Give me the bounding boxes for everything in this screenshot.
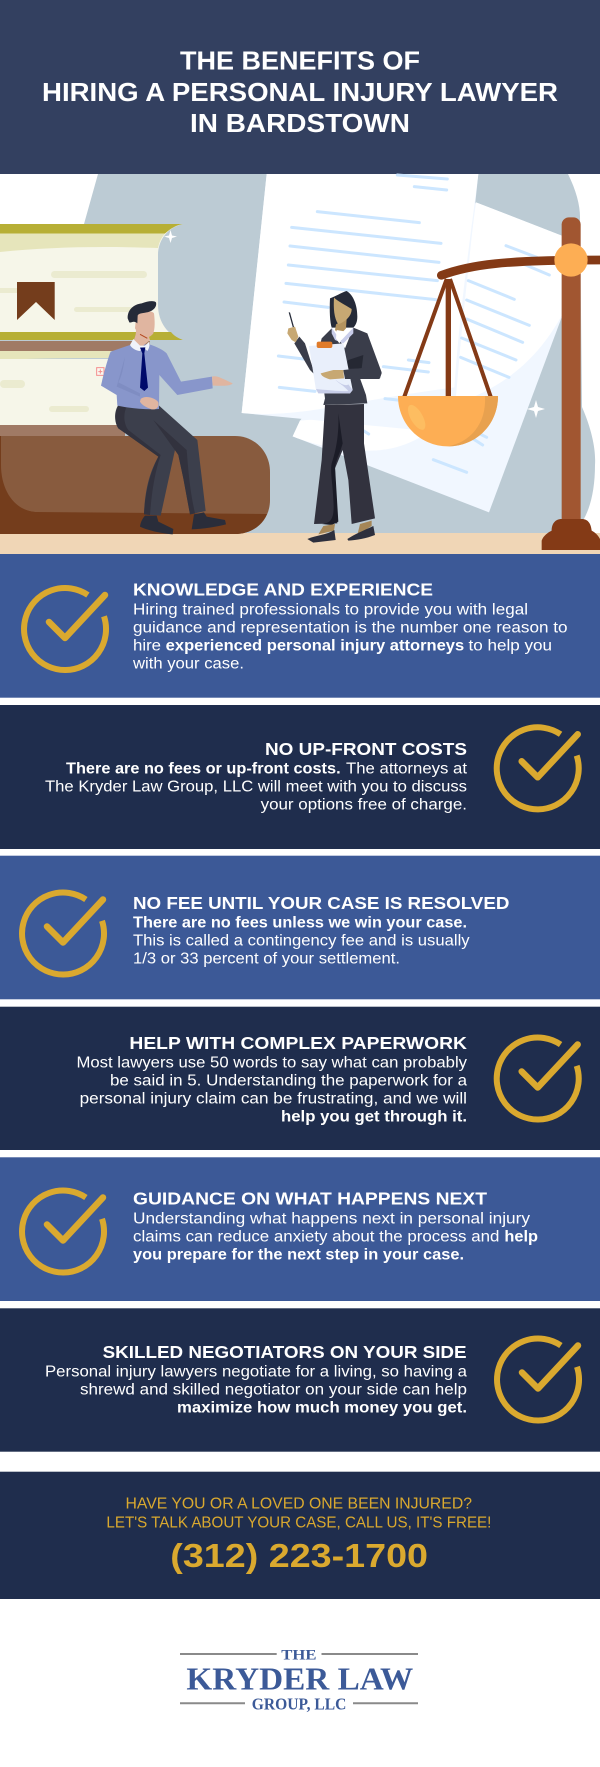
heading: KNOWLEDGE AND EXPERIENCE	[133, 580, 433, 600]
icon: sparkle	[164, 230, 177, 243]
title: THE BENEFITS OF	[180, 46, 420, 76]
text block	[133, 1210, 538, 1263]
background blob	[0, 174, 595, 534]
seated man	[101, 301, 233, 534]
text block: There are no fees unless we win your case.	[133, 914, 467, 931]
panel: call to action	[0, 1472, 600, 1599]
icon: check circle	[24, 588, 106, 670]
woman: upper body	[287, 291, 382, 405]
heading: NO UP-FRONT COSTS	[265, 739, 467, 759]
documents	[242, 174, 562, 512]
logo: The Kryder Law Group, LLC	[180, 1647, 418, 1713]
call to action text: LET'S TALK ABOUT YOUR CASE, CALL US, IT'S FREE!	[106, 1514, 491, 1531]
text block	[76, 1054, 467, 1125]
icon: small marker on book	[97, 368, 104, 375]
text block: Hiring trained professionals to provide you with legal	[133, 601, 528, 618]
woman: legs	[307, 404, 375, 543]
icon: check circle	[497, 727, 579, 809]
text block: The Kryder Law Group, LLC will meet with you to discuss	[45, 778, 467, 795]
text block: personal injury claim can be frustrating, and we will	[80, 1090, 467, 1107]
title: HIRING A PERSONAL INJURY LAWYER	[42, 77, 558, 107]
text block: maximize how much money you get.	[177, 1400, 467, 1417]
title: IN BARDSTOWN	[190, 108, 410, 138]
text block: The attorneys at	[346, 760, 468, 777]
heading: GUIDANCE ON WHAT HAPPENS NEXT	[133, 1189, 487, 1209]
text block: to help you	[468, 637, 552, 654]
panel: guidance on what happens next	[0, 1157, 600, 1301]
logo: The Kryder Law Group, LLC: GROUP, LLC	[252, 1694, 346, 1713]
panel: no fee until your case is resolved	[0, 856, 600, 999]
text block: help you get through it.	[281, 1108, 467, 1125]
text block: Most lawyers use 50 words to say what can probably	[76, 1054, 467, 1071]
logo: The Kryder Law Group, LLC: THE	[281, 1647, 316, 1663]
standing woman with clipboard	[287, 291, 382, 543]
stack of books	[0, 224, 270, 534]
panel: help with complex paperwork	[0, 1007, 600, 1150]
text block	[45, 1364, 467, 1417]
illustration: lawyers, books, documents and scales	[0, 174, 600, 554]
scales of justice	[398, 217, 600, 550]
panel: skilled negotiators on your side	[0, 1308, 600, 1452]
text block: This is called a contingency fee and is usually	[133, 932, 470, 950]
text block: Personal injury lawyers negotiate for a living, so having a	[45, 1364, 467, 1381]
text block: claims can reduce anxiety about the process and	[133, 1228, 499, 1245]
title	[42, 46, 558, 138]
text block	[132, 601, 568, 672]
icon: check circle	[497, 1038, 579, 1120]
logo: The Kryder Law Group, LLC: KRYDER LAW	[186, 1660, 413, 1696]
icon: check circle	[22, 1191, 104, 1273]
icon: check circle	[497, 1339, 579, 1421]
text block	[133, 914, 470, 967]
call to action text	[106, 1495, 491, 1531]
text block: with your case.	[132, 656, 244, 672]
text block: you prepare for the next step in your case.	[133, 1246, 464, 1263]
text block: your options free of charge.	[261, 796, 467, 814]
heading: NO FEE UNTIL YOUR CASE IS RESOLVED	[133, 893, 509, 913]
heading: HELP WITH COMPLEX PAPERWORK	[129, 1033, 467, 1053]
panel: knowledge and experience	[0, 554, 600, 698]
text block: guidance and representation is the number one reason to	[133, 619, 568, 636]
text block: be said in 5. Understanding the paperwork for a	[110, 1072, 467, 1089]
header banner	[0, 0, 600, 174]
text block: 1/3 or 33 percent of your settlement.	[133, 950, 400, 967]
text block: There are no fees or up-front costs.	[66, 760, 341, 777]
call to action text: HAVE YOU OR A LOVED ONE BEEN INJURED?	[126, 1495, 472, 1512]
icon: check circle	[22, 893, 104, 975]
text block: Understanding what happens next in personal injury	[133, 1210, 530, 1227]
text block	[45, 760, 468, 814]
icon: bookmark	[17, 282, 55, 320]
text block: experienced personal injury attorneys	[166, 637, 464, 654]
text block: shrewd and skilled negotiator on your side can help	[80, 1382, 467, 1399]
man: upper body	[101, 301, 233, 409]
ground	[0, 533, 600, 554]
panel: no up-front costs	[0, 705, 600, 849]
man: legs	[115, 405, 226, 534]
phone number: (312) 223-1700	[170, 1537, 428, 1574]
icon: sparkle	[527, 400, 545, 418]
heading: SKILLED NEGOTIATORS ON YOUR SIDE	[103, 1342, 467, 1362]
text block: help	[504, 1228, 538, 1245]
text block: hire	[133, 637, 161, 654]
